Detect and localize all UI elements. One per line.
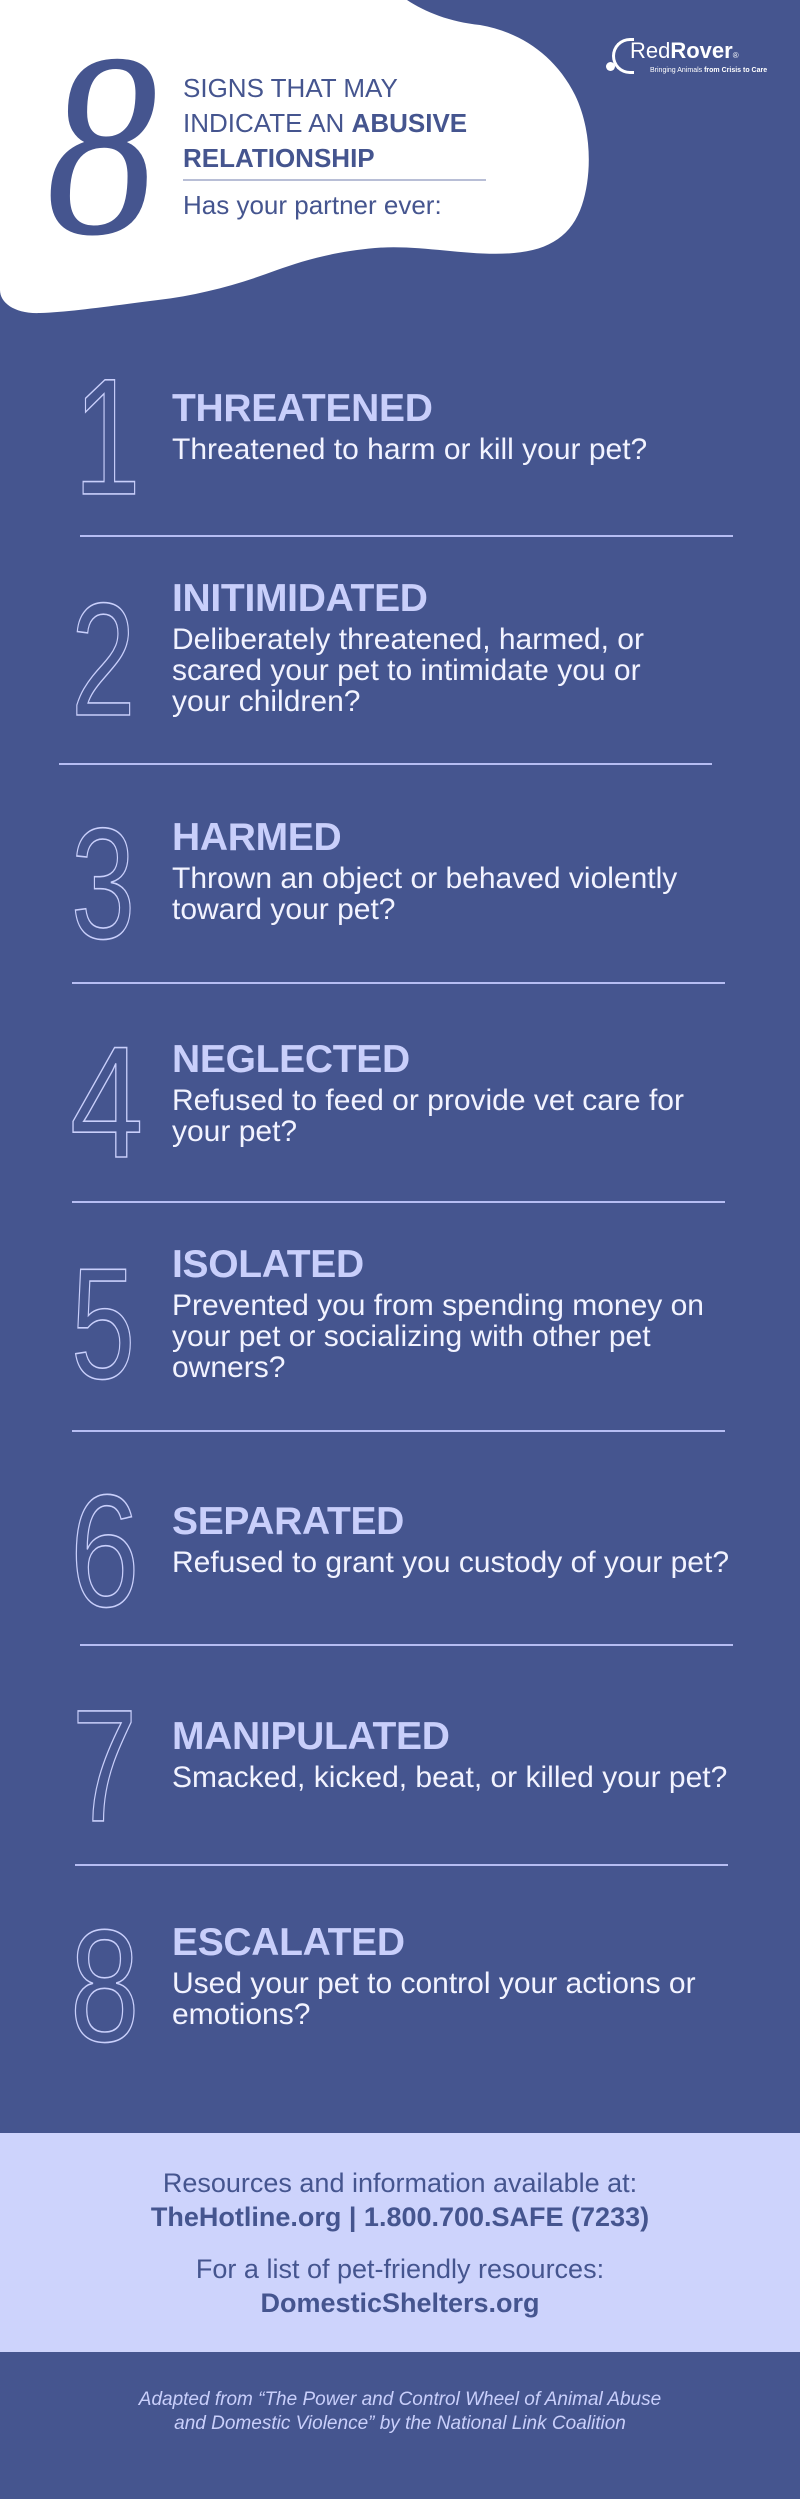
text 3: HARMED — [172, 816, 341, 859]
footer credit: Adapted from “The Power and Control Wheel of Animal Abuse — [139, 2389, 661, 2410]
item 3: number: 3 — [71, 796, 135, 972]
big number 8: 8 — [46, 0, 157, 290]
text 5 — [172, 1243, 704, 1384]
text 4 — [172, 1038, 684, 1148]
text 8: ESCALATED — [172, 1921, 405, 1964]
text 5: owners? — [172, 1351, 285, 1384]
resources panel: For a list of pet-friendly resources: — [196, 2254, 604, 2284]
item 1: number: 1 — [74, 344, 140, 530]
text 5: Prevented you from spending money on — [172, 1289, 704, 1322]
item 2: number: 2 — [71, 569, 135, 749]
text 7: MANIPULATED — [172, 1715, 450, 1758]
text 2: your children? — [172, 685, 360, 718]
resources panel — [0, 2133, 800, 2352]
header blob — [0, 0, 589, 314]
title — [183, 73, 467, 173]
text 4: NEGLECTED — [172, 1038, 410, 1081]
text 2 — [172, 577, 644, 718]
text 4: Refused to feed or provide vet care for — [172, 1084, 684, 1117]
logo: RedRover: RedRover® — [630, 38, 739, 63]
footer credit — [138, 2389, 661, 2434]
title: SIGNS THAT MAY — [183, 73, 398, 103]
text 2: INITIMIDATED — [172, 577, 428, 620]
title: INDICATE AN ABUSIVE — [183, 108, 467, 138]
logo: RedRover: Bringing Animals from Crisis to Care — [650, 67, 767, 74]
footer credit: and Domestic Violence” by the National Link Coalition — [174, 2413, 626, 2434]
text 1 — [172, 387, 647, 466]
item 6: number: 6 — [70, 1462, 139, 1641]
logo: RedRover — [606, 38, 767, 74]
text 6 — [172, 1500, 729, 1579]
text 5: ISOLATED — [172, 1243, 364, 1286]
item 4: number: 4 — [70, 1013, 143, 1191]
title: RELATIONSHIP — [183, 143, 375, 173]
text 2: Deliberately threatened, harmed, or — [172, 623, 644, 656]
text 1: Threatened to harm or kill your pet? — [172, 433, 647, 466]
text 2: scared your pet to intimidate you or — [172, 654, 641, 687]
text 3: Thrown an object or behaved violently — [172, 862, 677, 895]
text 8 — [172, 1921, 696, 2031]
text 3 — [172, 816, 678, 926]
text 6: Refused to grant you custody of your pet? — [172, 1546, 729, 1579]
text 4: your pet? — [172, 1115, 297, 1148]
text 6: SEPARATED — [172, 1500, 404, 1543]
subtitle: Has your partner ever: — [183, 190, 442, 220]
text 8: emotions? — [172, 1998, 310, 2031]
text 3: toward your pet? — [172, 893, 395, 926]
text 5: your pet or socializing with other pet — [172, 1320, 651, 1353]
item 7: number: 7 — [72, 1676, 137, 1855]
item 8: number: 8 — [70, 1897, 139, 2076]
resources panel: TheHotline.org | 1.800.700.SAFE (7233) — [151, 2202, 649, 2232]
text 1: THREATENED — [172, 387, 433, 430]
text 7 — [172, 1715, 727, 1794]
text 7: Smacked, kicked, beat, or killed your pet? — [172, 1761, 727, 1794]
text 8: Used your pet to control your actions or — [172, 1967, 696, 2000]
resources panel: DomesticShelters.org — [260, 2288, 540, 2318]
resources panel: Resources and information available at: — [163, 2168, 637, 2198]
item 5: number: 5 — [71, 1236, 135, 1412]
